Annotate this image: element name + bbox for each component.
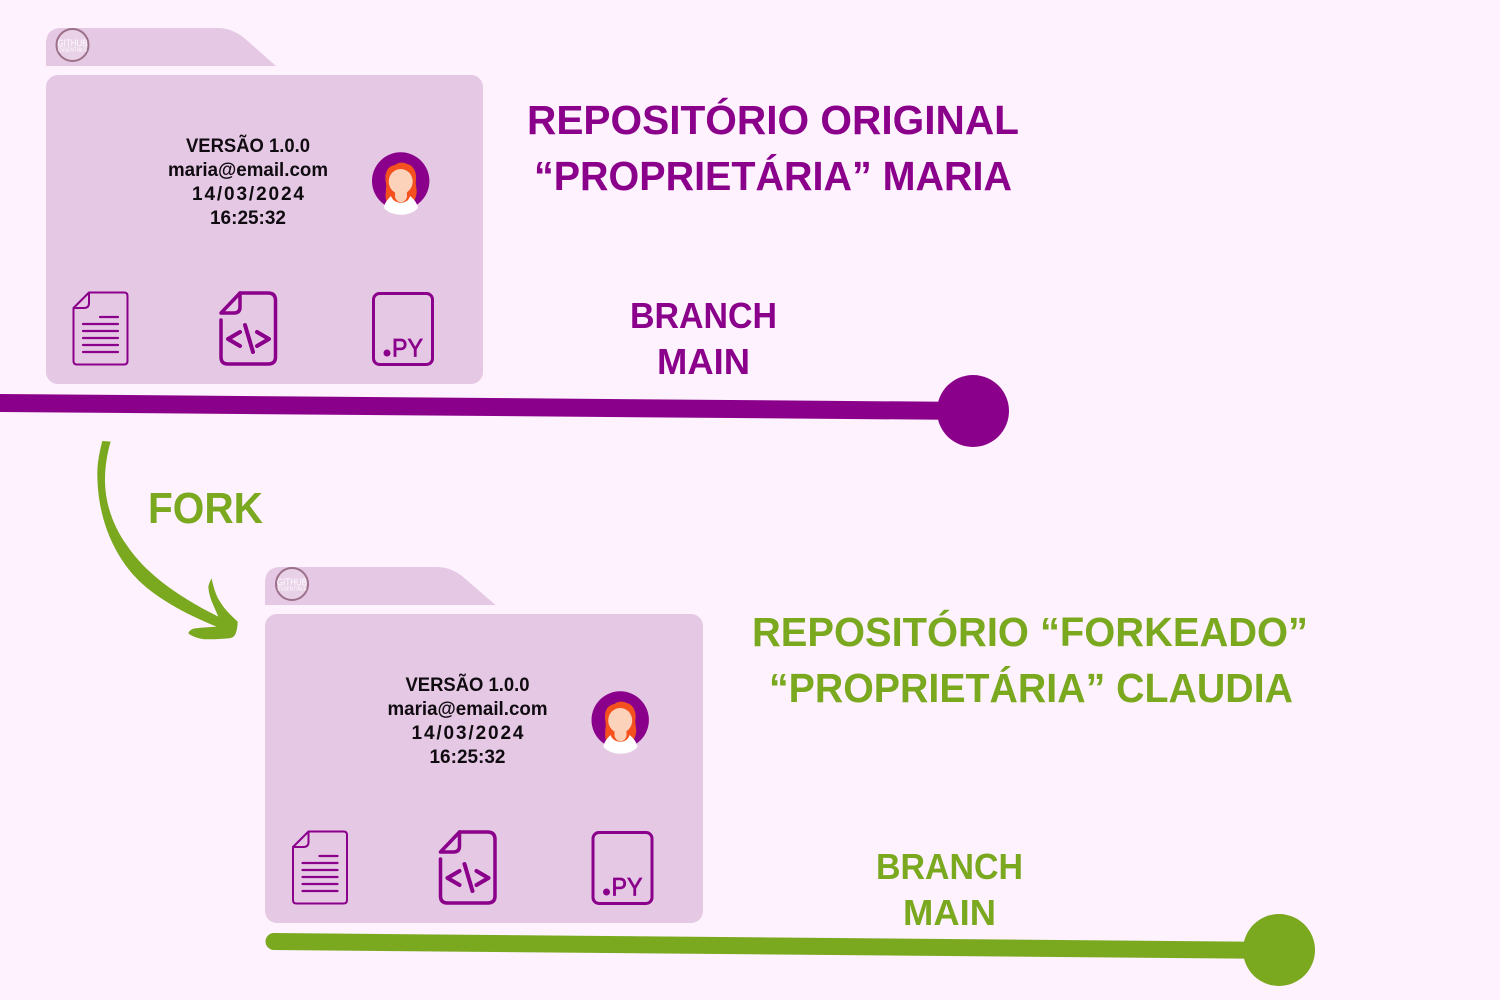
panel: forked repository	[265, 567, 703, 923]
badge: github essentials	[56, 29, 88, 61]
commit details text	[388, 674, 548, 768]
commit details text: 16:25:32	[430, 747, 506, 768]
icon: avatar maria	[592, 691, 649, 754]
label: branch main green	[876, 846, 1023, 933]
commit details text: 14/03/2024	[192, 184, 304, 205]
commit details text	[168, 135, 328, 229]
icon: code file	[221, 293, 276, 364]
label: branch main purple: BRANCH	[630, 295, 777, 336]
folder tab	[46, 28, 276, 66]
branch line: main green	[266, 914, 1315, 986]
badge: github essentials: GITHUB	[58, 38, 88, 50]
icon: text file	[74, 292, 128, 364]
badge: github essentials: ESSENTIALS	[58, 48, 88, 54]
commit details text: 16:25:32	[210, 208, 286, 229]
panel: original repository	[46, 28, 483, 384]
icon: text file	[293, 832, 347, 904]
repository card	[46, 75, 483, 384]
folder tab	[265, 567, 496, 605]
commit details text: 14/03/2024	[412, 723, 524, 744]
icon: python file	[374, 294, 432, 364]
label: fork: FORK	[148, 484, 263, 533]
icon: python file: PY	[612, 874, 643, 902]
commit details text: VERSÃO 1.0.0	[406, 674, 530, 696]
heading: forked repository: REPOSITÓRIO “FORKEADO”	[752, 609, 1308, 655]
label: branch main green: MAIN	[903, 892, 996, 933]
icon: python file	[593, 832, 652, 904]
badge: github essentials: ESSENTIALS	[278, 586, 307, 592]
icon: python file: PY	[392, 334, 423, 362]
badge: github essentials	[276, 568, 308, 600]
badge: github essentials: GITHUB	[277, 578, 307, 588]
heading: original repository	[527, 97, 1019, 199]
heading: forked repository: “PROPRIETÁRIA” CLAUDIA	[769, 665, 1293, 711]
heading: original repository: “PROPRIETÁRIA” MARIA	[534, 153, 1012, 199]
commit details text: maria@email.com	[168, 160, 328, 181]
icon: avatar maria	[372, 152, 429, 215]
label: branch main green: BRANCH	[876, 846, 1023, 887]
branch line: main purple	[0, 375, 1009, 447]
arrow: fork	[97, 441, 238, 639]
repository card	[265, 614, 703, 923]
label: branch main purple: MAIN	[657, 341, 750, 382]
label: branch main purple	[630, 295, 777, 382]
heading: forked repository	[752, 609, 1308, 711]
icon: code file	[440, 832, 495, 903]
commit details text: maria@email.com	[388, 699, 548, 720]
heading: original repository: REPOSITÓRIO ORIGINAL	[527, 97, 1019, 143]
commit details text: VERSÃO 1.0.0	[186, 135, 310, 157]
